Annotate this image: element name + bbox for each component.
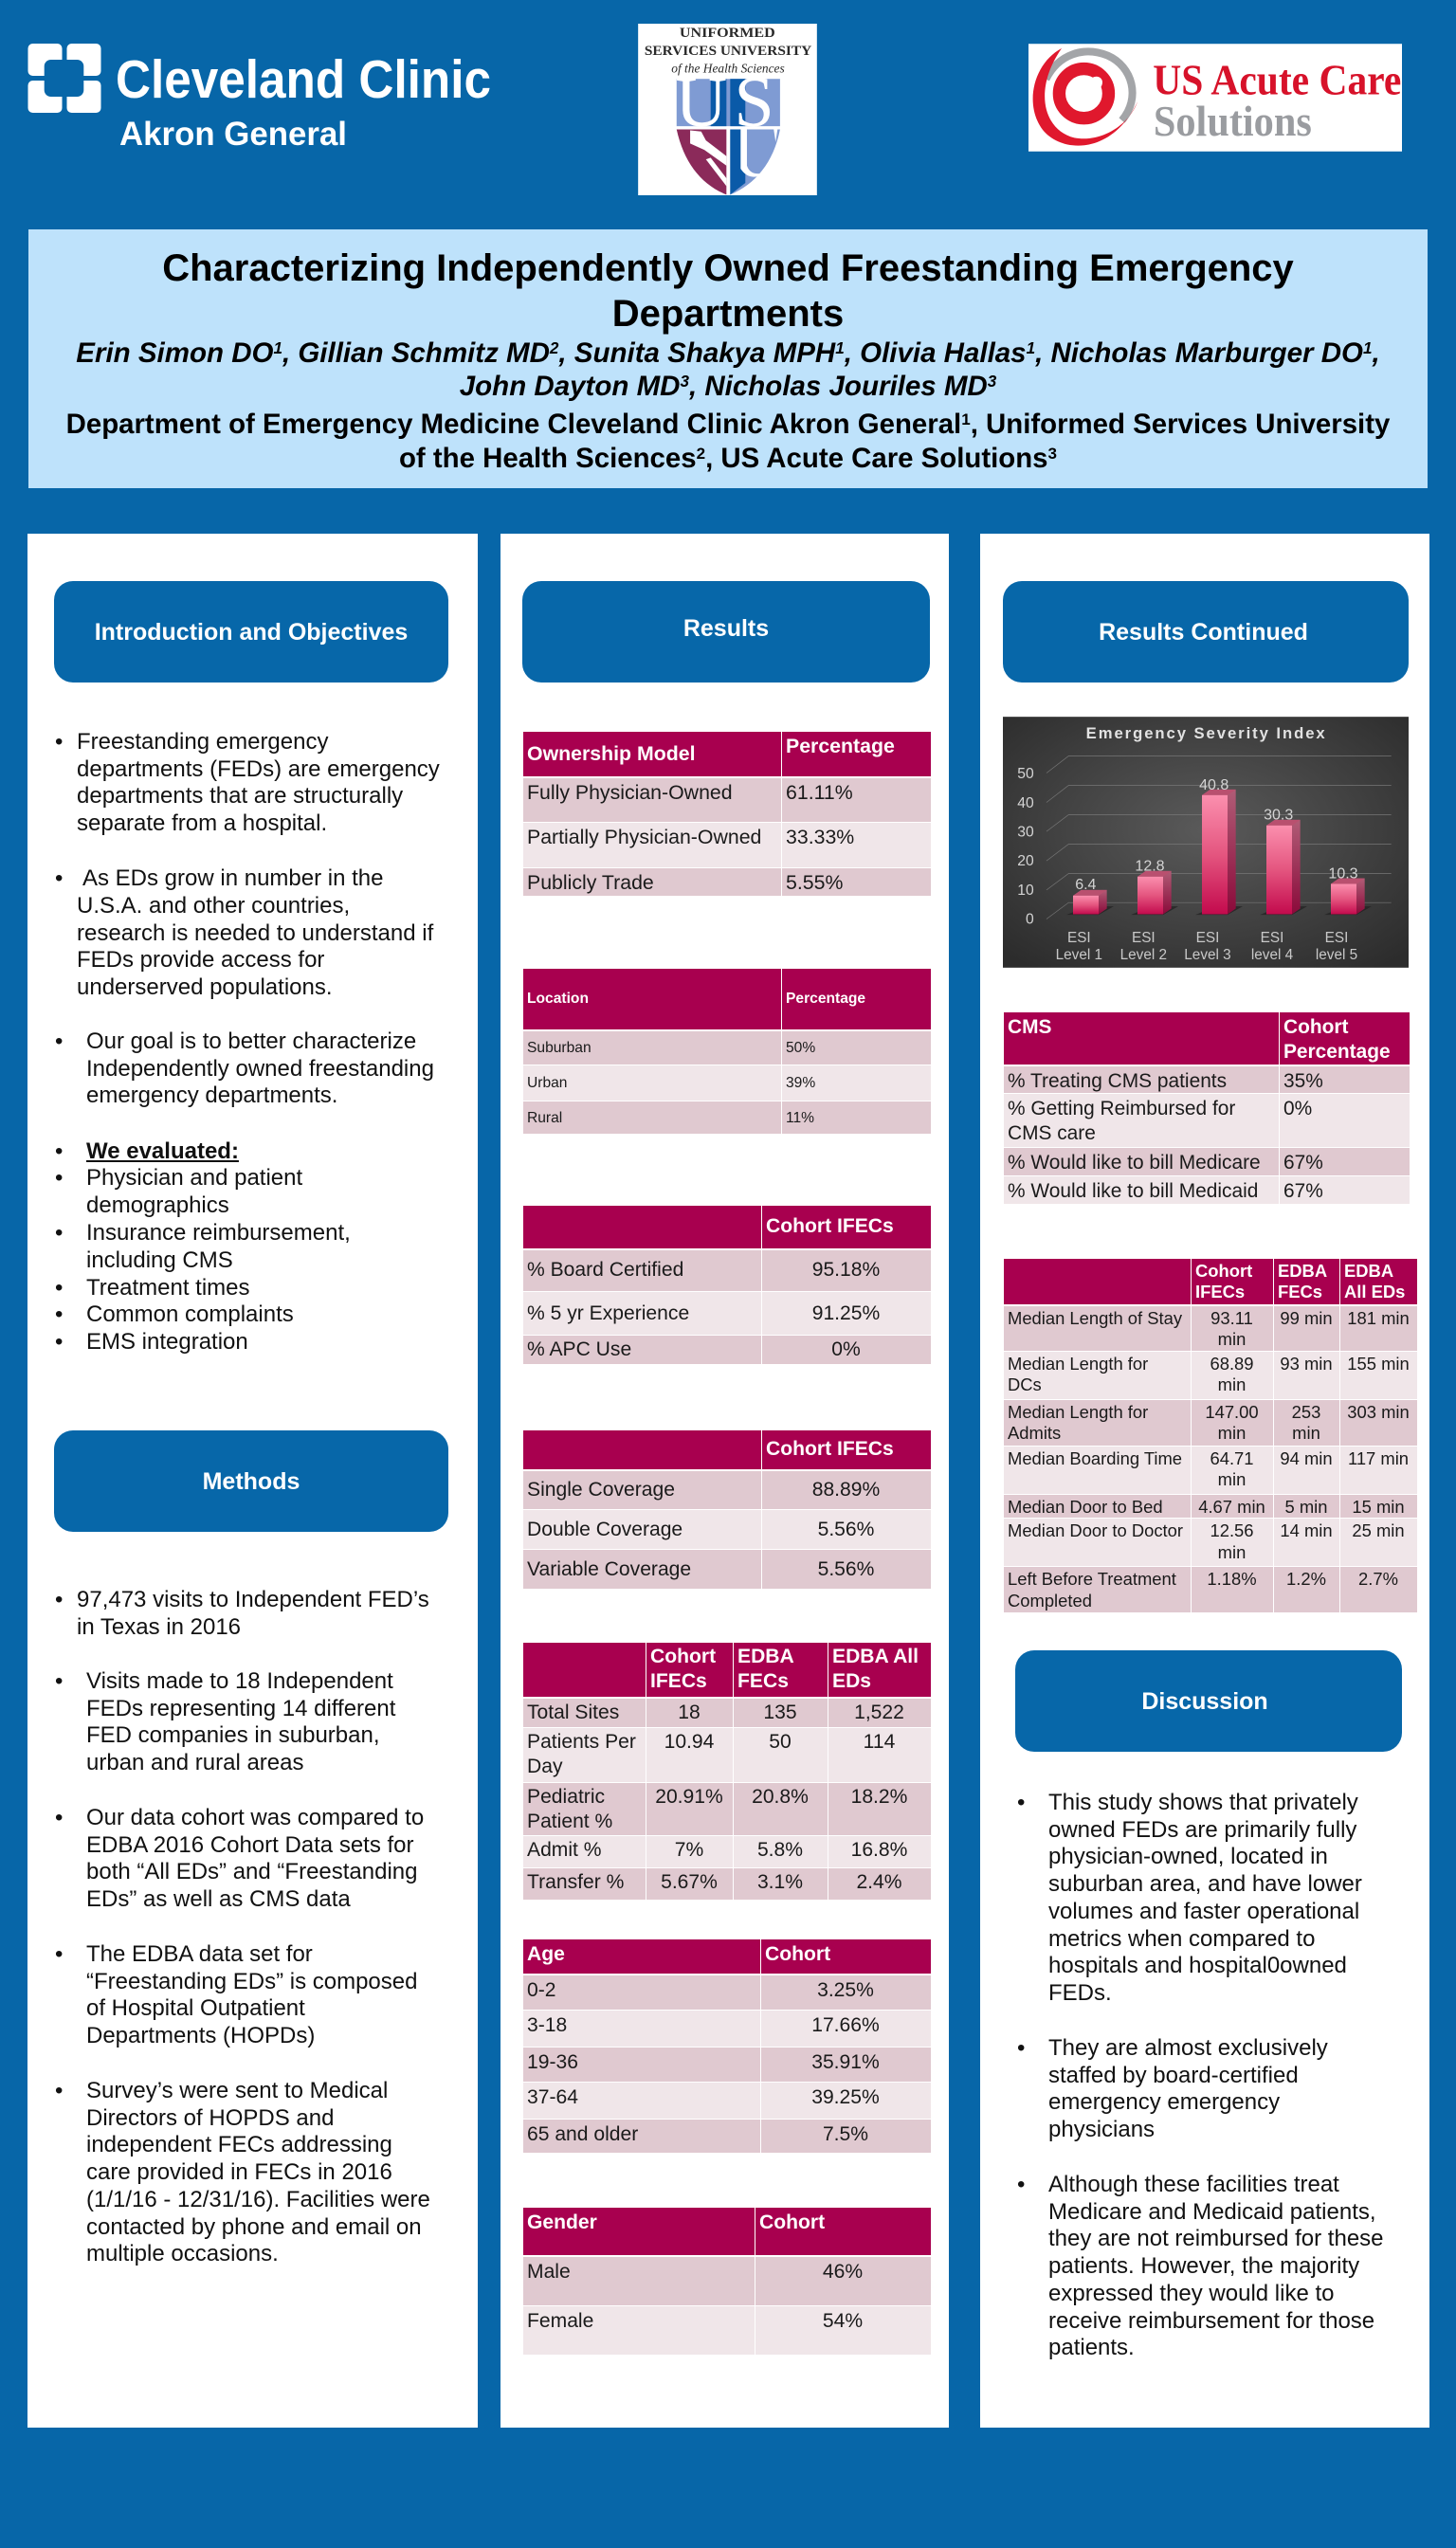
axis labels: 30 [1017,825,1034,841]
text block: introduction bullets: emergency departments. [86,1083,337,1108]
table header: % APC Use [527,1338,631,1360]
table header [523,969,931,1134]
table header: Left Before Treatment [1008,1569,1176,1589]
text block: discussion bullets: • [1017,1790,1025,1815]
text block: introduction bullets: including CMS [86,1247,233,1273]
heading: Results Continued: Results Continued [1099,619,1308,646]
text block: methods bullets: of Hospital Outpatient [86,1995,305,2021]
gridlines [1046,756,1392,919]
table header: CMS [1008,1016,1051,1038]
table header: 253 [1292,1402,1320,1422]
heading: Methods [54,1430,448,1532]
table header: 2.4% [856,1871,902,1893]
bar values [1075,777,1358,893]
panel: column 1 [27,534,478,2428]
table: operational metrics [1004,1259,1417,1612]
icon: shield: S [735,63,774,142]
table: physician staffing [523,1206,931,1364]
table header: min [1218,1469,1246,1489]
table header: 1.18% [1207,1569,1257,1589]
table header [523,1430,931,1589]
table header [523,1939,931,2153]
table header: All EDs [1344,1282,1405,1301]
text block: methods bullets: FED companies in suburban, [86,1722,379,1748]
heading: Results: Results [683,615,769,642]
text block: methods bullets: • [55,1587,63,1612]
table header: 117 min [1348,1448,1409,1468]
table header: DCs [1008,1374,1042,1394]
table header: 12.56 [1210,1520,1254,1540]
text block: introduction bullets: separate from a hospital. [77,810,327,836]
table header: Median Boarding Time [1008,1448,1182,1468]
table header: 61.11% [786,781,853,804]
category labels: Level 3 [1184,947,1231,963]
text block: introduction bullets: demographics [86,1192,229,1218]
table header: Cohort IFECs [766,1438,894,1460]
text block: discussion bullets: receive reimbursement for those [1048,2308,1374,2334]
logo wordmark: of the Health Sciences [671,62,785,76]
table header: 0% [1283,1098,1312,1119]
table header: % Would like to bill Medicaid [1008,1180,1258,1202]
text block: introduction bullets: Our goal is to better characterize [86,1028,416,1054]
logo: Cleveland Clinic Akron General [28,44,491,153]
table header: Age [527,1943,565,1965]
table header: 135 [763,1701,797,1723]
text block: methods bullets: Departments (HOPDs) [86,2023,315,2048]
affiliations: Department of Emergency Medicine Cleveland Clinic Akron General1, Uniformed Services University [66,409,1390,440]
table header: 54% [823,2310,863,2332]
text block: discussion bullets: This study shows that privately [1048,1790,1358,1815]
table header: 0-2 [527,1979,555,2000]
logo wordmark: SERVICES UNIVERSITY [645,44,812,59]
table header: 5.8% [757,1839,803,1861]
text block: discussion bullets: hospitals and hospital0owned [1048,1953,1347,1978]
table header: % Treating CMS patients [1008,1069,1227,1092]
text block: introduction bullets: FEDs provide access for [77,947,324,973]
logo: Uniformed Services University [638,24,817,195]
text block: introduction bullets: U.S.A. and other countries, [77,893,350,919]
text block: introduction bullets: Physician and patient [86,1165,302,1191]
table header: Total Sites [527,1701,619,1723]
icon: swirl [1033,48,1138,146]
table header: 4.67 min [1198,1497,1265,1517]
category labels: level 5 [1316,947,1357,963]
text block: introduction bullets: Freestanding emergency [77,729,328,755]
axis labels [1017,766,1034,927]
text block: introduction bullets: • [55,729,63,755]
category labels: ESI [1067,930,1091,946]
text block: introduction bullets: • [55,1301,63,1327]
table header: 7.5% [823,2123,868,2145]
table header: 39.25% [811,2086,880,2108]
table header: Median Length of Stay [1008,1308,1182,1327]
text block: methods bullets: urban and rural areas [86,1750,303,1775]
table header: min [1292,1423,1320,1443]
table header: 0% [831,1338,861,1360]
text block: discussion bullets: Although these facilities treat [1048,2172,1339,2197]
table header: 181 min [1347,1308,1410,1327]
text block: introduction bullets: Treatment times [86,1275,250,1301]
text block: discussion bullets: staffed by board-certified [1048,2063,1299,2088]
text block: introduction bullets: underserved populations. [77,974,333,1000]
table header: % Getting Reimbursed for [1008,1098,1235,1119]
text block: methods bullets: • [55,1668,63,1694]
table header: 94 min [1280,1448,1333,1468]
heading: Methods: Methods [203,1468,300,1495]
text block: introduction bullets [55,729,440,1355]
heading: Introduction and Objectives: Introduction and Objectives [95,619,408,646]
bar values: 6.4 [1075,877,1097,893]
table header: 93.11 [1210,1308,1253,1327]
table header: Transfer % [527,1871,624,1893]
affiliations [66,409,1390,474]
authors: John Dayton MD3, Nicholas Jouriles MD3 [460,371,996,402]
table header: 11% [786,1109,814,1126]
text block: introduction bullets: We evaluated: [86,1138,239,1164]
table header: 19-36 [527,2051,578,2073]
heading: Introduction and Objectives [54,581,448,682]
category labels: level 4 [1251,947,1294,963]
axis labels: 0 [1026,912,1034,927]
table header: Male [527,2260,571,2283]
table header: 14 min [1280,1520,1333,1540]
text block: introduction bullets: • [55,1028,63,1054]
heading: Discussion [1015,1650,1402,1752]
table header: IFECs [1195,1282,1245,1301]
bar values: 12.8 [1135,859,1165,875]
logo wordmark [116,49,491,153]
panel: column 2 [500,534,949,2428]
text block: introduction bullets: • [55,1220,63,1246]
text block: methods bullets: independent FECs addressing [86,2132,392,2157]
text block: introduction bullets: • [55,865,63,891]
bar values: 40.8 [1199,777,1228,793]
text block: methods bullets: (1/1/16 - 12/31/16). Facilities were [86,2187,430,2212]
table header: Cohort [1283,1016,1348,1038]
affiliations: of the Health Sciences2, US Acute Care Solutions3 [399,443,1057,474]
text block: discussion bullets: physician-owned, located in [1048,1844,1328,1869]
category labels: Level 2 [1120,947,1167,963]
table header: 65 and older [527,2123,638,2145]
table header: FECs [1278,1282,1322,1301]
table header: IFECs [650,1670,707,1692]
table header: 5.67% [661,1871,718,1893]
text block: introduction bullets: Independently owned freestanding [86,1056,434,1082]
authors [76,337,1380,402]
table: site comparison [523,1643,931,1900]
text block: discussion bullets: They are almost exclusively [1048,2035,1328,2061]
text block: discussion bullets: • [1017,2172,1025,2197]
table header: 3.25% [817,1979,874,2000]
text block: discussion bullets: metrics when compared to [1048,1926,1315,1952]
table header: % 5 yr Experience [527,1302,689,1324]
text block: methods bullets: Survey’s were sent to Medical [86,2078,388,2103]
text block: methods bullets: EDs” as well as CMS data [86,1886,351,1912]
table header: 50 [769,1731,792,1753]
text block: discussion bullets: patients. However, the majority [1048,2253,1359,2279]
chart: Emergency Severity Index [1003,717,1409,968]
title: Departments [612,293,844,335]
table header: Cohort IFECs [766,1215,894,1237]
table: physician coverage [523,1430,931,1589]
logo wordmark: UNIFORMED [680,26,775,41]
table header: 114 [864,1731,895,1753]
table: age [523,1939,931,2153]
table header: min [1218,1374,1246,1394]
table header: EDBA All [832,1646,919,1667]
bars [1066,790,1372,915]
bar values: 10.3 [1328,866,1358,882]
text block: methods bullets: care provided in FECs in 2016 [86,2159,392,2185]
table header: 1.2% [1286,1569,1326,1589]
table header: Cohort [1195,1261,1252,1281]
table header: Percentage [786,735,895,757]
table header: 3.1% [757,1871,803,1893]
table header: 91.25% [812,1302,880,1324]
table header: min [1218,1423,1246,1443]
table header: 5 min [1285,1497,1327,1517]
table header: Admits [1008,1423,1061,1443]
text block: methods bullets: • [55,1805,63,1830]
table header: 7% [675,1839,703,1861]
table header: 46% [823,2260,863,2283]
table header: Gender [527,2211,597,2233]
table header: 93 min [1280,1354,1333,1374]
table header [523,1206,931,1364]
table header: Pediatric [527,1786,605,1808]
text block: discussion bullets [1017,1790,1384,2360]
heading: Results Continued [1003,581,1409,682]
table header: 95.18% [812,1259,880,1281]
table header: Cohort [765,1943,830,1965]
table header: EDs [832,1670,871,1692]
text block: discussion bullets: they are not reimbursed for these [1048,2226,1384,2251]
text block: discussion bullets: • [1017,2035,1025,2061]
logo: US Acute Care Solutions [1028,44,1402,152]
table header: Median Door to Bed [1008,1497,1163,1517]
logo wordmark: Solutions [1154,98,1312,145]
heading: Results [522,581,930,682]
table header: 35% [1283,1069,1323,1092]
table header: Location [527,991,589,1007]
text block: discussion bullets: expressed they would like to [1048,2281,1335,2306]
text block: introduction bullets: • [55,1329,63,1355]
table header: EDBA [1344,1261,1393,1281]
text block: methods bullets [55,1587,430,2266]
table header: 50% [786,1040,815,1056]
table header: Patients Per [527,1731,636,1753]
table header: 303 min [1347,1402,1410,1422]
table header: 3-18 [527,2014,567,2036]
table header: Day [527,1756,563,1777]
table header: CMS care [1008,1122,1096,1144]
text block: introduction bullets: • [55,1165,63,1191]
table header: 88.89% [812,1479,880,1501]
text block: methods bullets: in Texas in 2016 [77,1614,241,1640]
table header: 25 min [1352,1520,1405,1540]
text block: methods bullets: contacted by phone and email on [86,2214,422,2240]
text block: introduction bullets: research is needed to understand if [77,920,433,946]
table header: Completed [1008,1591,1092,1611]
text block: methods bullets: multiple occasions. [86,2241,279,2266]
text block: methods bullets: Our data cohort was compared to [86,1805,424,1830]
category labels: ESI [1132,930,1156,946]
table header: 15 min [1352,1497,1405,1517]
table header: Double Coverage [527,1519,682,1540]
axis labels: 40 [1017,795,1034,811]
table header: 5.56% [818,1558,874,1580]
logo wordmark [645,26,812,76]
table header: 16.8% [851,1839,907,1861]
table header: min [1218,1329,1246,1349]
table header: 99 min [1280,1308,1333,1327]
table header: Variable Coverage [527,1558,691,1580]
table header: 17.66% [811,2014,880,2036]
text block: discussion bullets: volumes and faster operational [1048,1899,1359,1924]
table header: 35.91% [811,2051,880,2073]
table header: 5.55% [786,871,843,894]
text block: introduction bullets: • [55,1138,63,1164]
text block: methods bullets: FEDs representing 14 different [86,1696,395,1721]
category labels: Level 1 [1056,947,1102,963]
table header: Median Door to Doctor [1008,1520,1183,1540]
authors: Erin Simon DO1, Gillian Schmitz MD2, Sunita Shakya MPH1, Olivia Hallas1, Nicholas Marburger DO1, [76,337,1380,369]
table header: 39% [786,1075,815,1091]
table header: % Board Certified [527,1259,683,1281]
title [162,247,1294,335]
table header: 155 min [1347,1354,1410,1374]
heading: Discussion: Discussion [1141,1688,1268,1715]
text block: methods bullets: EDBA 2016 Cohort Data sets for [86,1832,414,1858]
text block: methods bullets: • [55,2078,63,2103]
category labels: ESI [1325,930,1348,946]
icon: Cleveland Clinic cross [28,44,100,113]
table: gender [523,2208,931,2355]
text block: introduction bullets: EMS integration [86,1329,248,1355]
table header [1004,1259,1417,1612]
text block: methods bullets: • [55,1941,63,1967]
bar values: 30.3 [1264,808,1293,824]
text block: discussion bullets: physicians [1048,2117,1155,2142]
text block: methods bullets: both “All EDs” and “Freestanding [86,1859,417,1884]
table header: Admit % [527,1839,602,1861]
table header: 10.94 [664,1731,714,1753]
table header: Ownership Model [527,742,696,765]
table header: 5.56% [818,1519,874,1540]
text block: discussion bullets: FEDs. [1048,1980,1112,2006]
text block: methods bullets: The EDBA data set for [86,1941,313,1967]
table header: Fully Physician-Owned [527,781,733,804]
table header: Median Length for [1008,1354,1148,1374]
text block: discussion bullets: Medicare and Medicaid patients, [1048,2199,1376,2225]
table header: Patient % [527,1811,612,1832]
text block: introduction bullets: departments (FEDs) are emergency [77,756,440,782]
table header: Partially Physician-Owned [527,826,761,848]
table header: FECs [737,1670,789,1692]
table header: Urban [527,1075,567,1091]
table header [523,1643,931,1900]
table header: 68.89 [1210,1354,1254,1374]
table header: Single Coverage [527,1479,675,1501]
text block: methods bullets: 97,473 visits to Independent FED’s [77,1587,429,1612]
icon: shield: U [675,63,727,142]
text block: introduction bullets: departments that are structurally [77,783,403,809]
text block: discussion bullets: suburban area, and have lower [1048,1871,1362,1897]
table header [523,732,931,896]
table header: Female [527,2310,593,2332]
axis labels: 10 [1017,883,1034,899]
text block: methods bullets: “Freestanding EDs” is composed [86,1969,417,1994]
table header: 64.71 [1210,1448,1254,1468]
table header: Percentage [786,991,865,1007]
text block: discussion bullets: owned FEDs are primarily fully [1048,1817,1356,1843]
text block: discussion bullets: patients. [1048,2335,1135,2360]
table header: min [1218,1542,1246,1562]
text block: methods bullets: Directors of HOPDS and [86,2105,334,2131]
table header: Suburban [527,1040,592,1056]
table header: Cohort [759,2211,825,2233]
icon: shield [675,63,780,194]
axis labels: 20 [1017,853,1034,869]
text block: introduction bullets: Insurance reimbursement, [86,1220,351,1246]
text block: introduction bullets: • [55,1275,63,1301]
table header: 18 [678,1701,701,1723]
table header: 2.7% [1358,1569,1398,1589]
table header: 67% [1283,1180,1323,1202]
table header: 20.91% [655,1786,723,1808]
category labels: ESI [1261,930,1283,946]
table header: % Would like to bill Medicare [1008,1152,1261,1174]
table header [523,2208,931,2355]
table header: 147.00 [1205,1402,1259,1422]
axis labels: 50 [1017,766,1034,782]
table: location [523,969,931,1134]
table header: EDBA [1278,1261,1327,1281]
table header: Publicly Trade [527,871,654,894]
title panel [28,229,1428,488]
panel: column 3 [980,534,1429,2428]
table header: Rural [527,1109,562,1126]
text block: methods bullets: Visits made to 18 Independent [86,1668,393,1694]
text block: introduction bullets: As EDs grow in number in the [82,865,383,891]
table header: 18.2% [851,1786,907,1808]
text block: discussion bullets: emergency emergency [1048,2089,1280,2115]
chart title: Emergency Severity Index [1086,724,1325,742]
table header: 33.33% [786,826,854,848]
logo wordmark [1153,57,1401,145]
table header: Median Length for [1008,1402,1148,1422]
table header: Percentage [1283,1041,1391,1063]
table header: 37-64 [527,2086,578,2108]
table header: 20.8% [752,1786,809,1808]
table header: 1,522 [854,1701,904,1723]
table header [1004,1012,1410,1204]
title: Characterizing Independently Owned Freestanding Emergency [162,247,1294,289]
table header: 67% [1283,1152,1323,1174]
category labels: ESI [1196,930,1219,946]
table: CMS [1004,1012,1410,1204]
table header: Cohort [650,1646,716,1667]
table: ownership model [523,732,931,896]
table header: EDBA [737,1646,794,1667]
text block: introduction bullets: Common complaints [86,1301,294,1327]
logo wordmark: Akron General [119,116,347,153]
category labels [1056,930,1357,963]
